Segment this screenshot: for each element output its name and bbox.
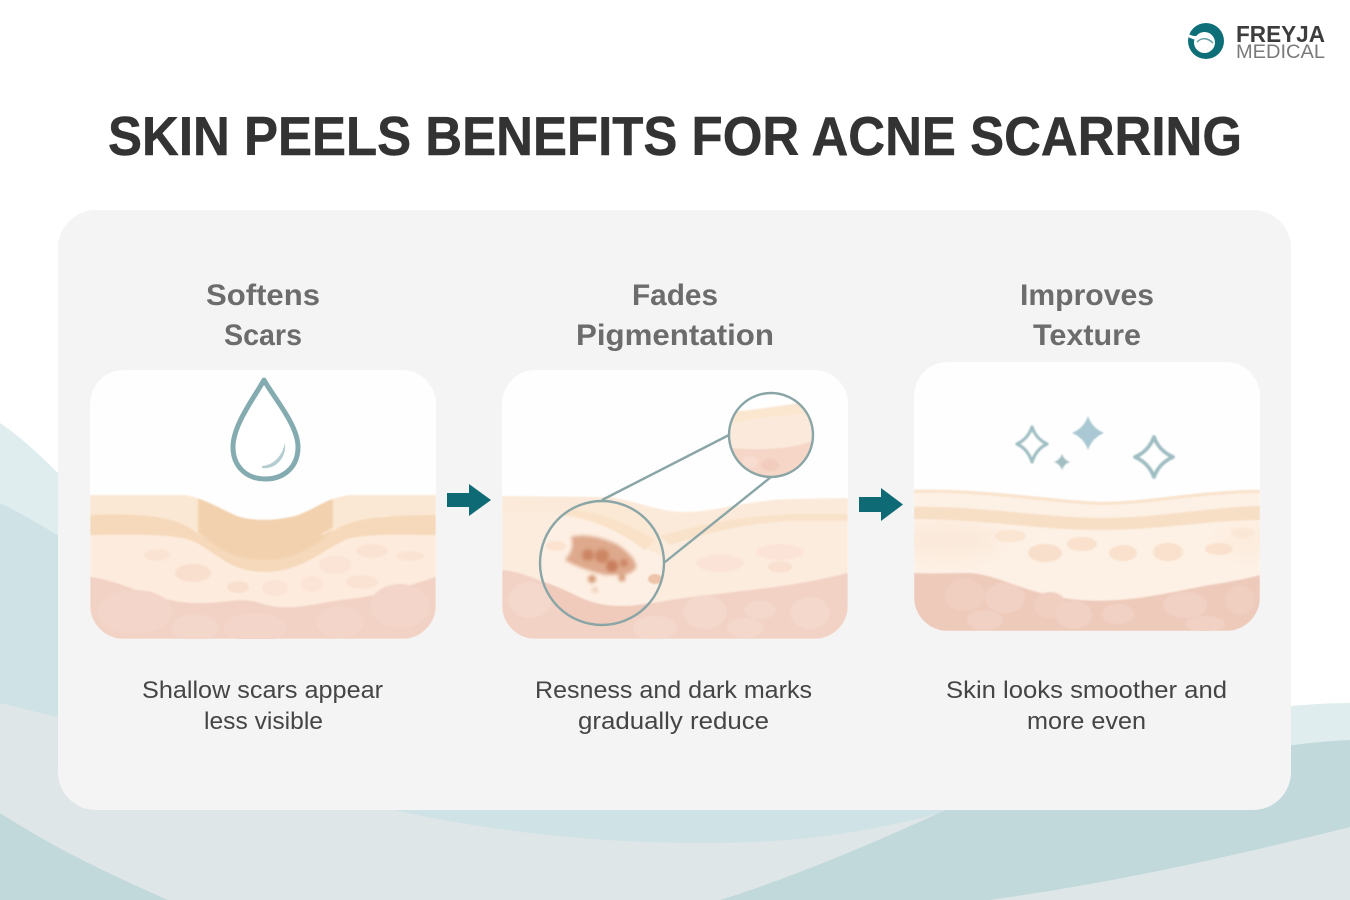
heading: Softens Scars: Softens <box>206 279 320 312</box>
arrow: fades to improves <box>859 488 903 521</box>
text: fades description: Resness and dark marks <box>535 677 812 704</box>
icon: sparkles <box>1017 416 1173 477</box>
small lens <box>725 393 815 480</box>
text: improves description: more even <box>1027 708 1146 735</box>
logo wordmark <box>1236 21 1325 63</box>
heading: Improves Texture <box>1020 279 1154 352</box>
icon: water drop <box>233 380 298 479</box>
heading: Improves Texture: Improves <box>1020 279 1154 312</box>
text: softens description <box>142 677 383 735</box>
heading: Fades Pigmentation <box>576 279 774 352</box>
arrow: softens to fades <box>447 484 491 516</box>
logo wordmark: FREYJA <box>1236 21 1325 47</box>
illustration: smooth skin with sparkles <box>900 362 1280 632</box>
icon: logo ring <box>1186 23 1224 59</box>
text: fades description <box>535 677 812 735</box>
large lens: pigmented spot <box>538 500 666 626</box>
title: SKIN PEELS BENEFITS FOR ACNE SCARRING <box>108 105 1242 167</box>
logo wordmark: MEDICAL <box>1236 42 1325 63</box>
illustration: softened scar with drop <box>90 370 436 643</box>
connector lines <box>602 435 771 562</box>
illustration: pigmentation with magnifier <box>502 370 848 640</box>
text: softens description: Shallow scars appear <box>142 677 383 704</box>
text: softens description: less visible <box>204 708 323 735</box>
text: fades description: gradually reduce <box>578 708 769 735</box>
heading: Fades Pigmentation: Fades <box>632 279 718 312</box>
heading: Softens Scars <box>206 279 320 352</box>
heading: Improves Texture: Texture <box>1033 319 1141 352</box>
text: improves description: Skin looks smoother and <box>946 677 1227 704</box>
heading: Fades Pigmentation: Pigmentation <box>576 319 774 352</box>
text: improves description <box>946 677 1227 735</box>
heading: Softens Scars: Scars <box>224 319 302 352</box>
panel: benefits <box>58 210 1291 810</box>
logo: Freyja Medical <box>1186 21 1325 63</box>
